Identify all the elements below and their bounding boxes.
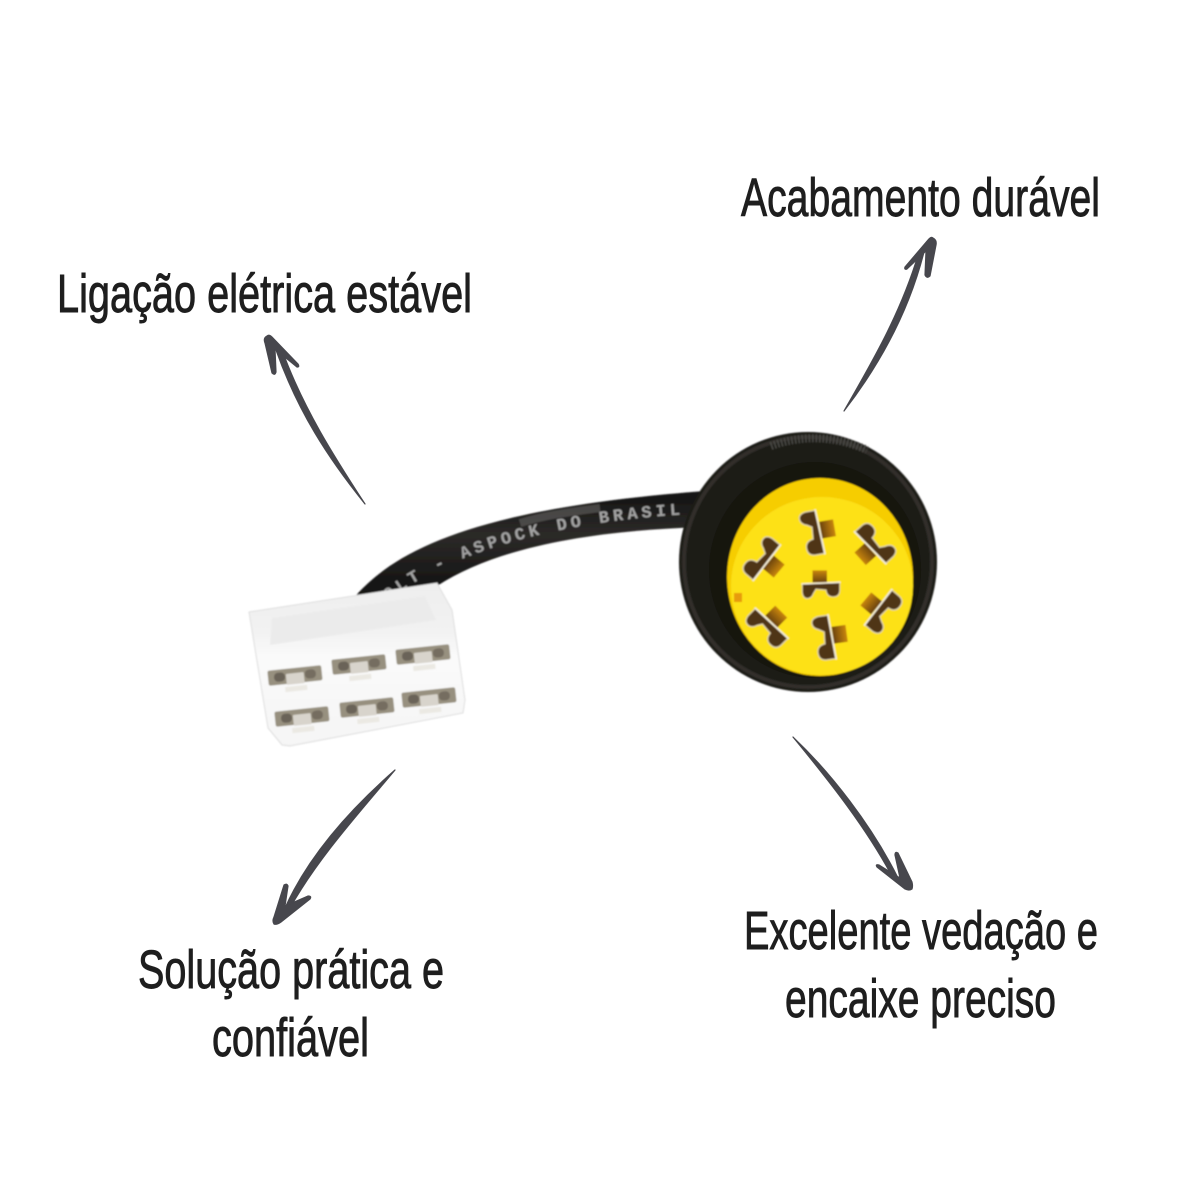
label: Ligação elétrica estável: Ligação elétrica estável bbox=[57, 264, 472, 324]
white six-way plug bbox=[249, 583, 465, 746]
small side notch bbox=[734, 593, 742, 602]
product photo: adapter cable bbox=[248, 430, 938, 747]
inner opening bbox=[709, 462, 921, 678]
yellow front face bbox=[731, 497, 913, 675]
label: Excelente vedação e encaixe preciso: encaixe preciso bbox=[785, 969, 1056, 1029]
cable bbox=[356, 490, 746, 642]
terminal slots bbox=[267, 644, 457, 735]
cable print: VOLT - ASPOCK DO BRASIL bbox=[384, 502, 681, 591]
arrow: to Excelente vedação e encaixe preciso bbox=[793, 737, 912, 890]
terminals bbox=[738, 507, 907, 662]
label: Solução prática e confiável: confiável bbox=[212, 1008, 369, 1068]
label: Solução prática e confiável: Solução prática e bbox=[138, 940, 444, 1000]
arrow: to Acabamento durável bbox=[844, 237, 936, 411]
outer black ring bbox=[679, 432, 937, 692]
label: Excelente vedação e encaixe preciso bbox=[744, 901, 1098, 1029]
yellow back bbox=[727, 478, 913, 676]
arrow: to Solução prática e confiável bbox=[273, 770, 395, 924]
arrow: to Ligação elétrica estável bbox=[264, 335, 365, 504]
label: Solução prática e confiável bbox=[138, 940, 444, 1068]
round yellow connector bbox=[679, 432, 937, 692]
